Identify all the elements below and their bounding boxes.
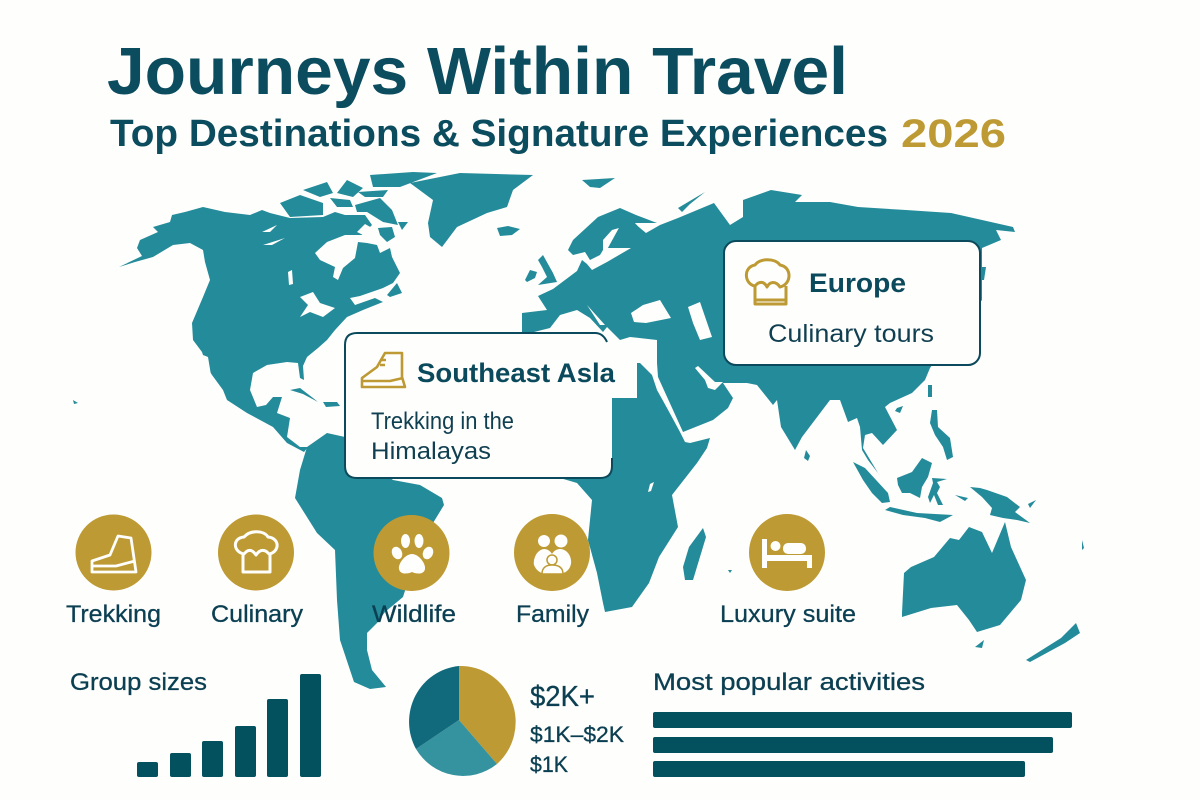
chart heading: Most popular activities: [653, 669, 925, 696]
callout heading: Europe: [809, 268, 906, 298]
callout text: Himalayas: [371, 438, 491, 465]
callout: southeast asia: [345, 333, 637, 478]
callout text: Trekking in the: [371, 408, 514, 435]
callout text: Culinary tours: [768, 320, 934, 348]
chart: group sizes: [70, 669, 321, 777]
tasmania and new zealand: [975, 623, 1080, 662]
chart heading: Group sizes: [70, 669, 207, 696]
callout: europe: [724, 241, 980, 365]
finland: [608, 222, 646, 248]
world map: [73, 172, 1084, 689]
inland seas: [203, 224, 723, 492]
bars: [137, 674, 321, 777]
pie legend: $2K+: [530, 681, 595, 713]
category: culinary: [211, 514, 303, 628]
australia: [902, 522, 1026, 632]
africa: [515, 363, 710, 612]
icon row: [66, 514, 856, 628]
category: trekking: Trekking: [66, 601, 161, 628]
north america: [119, 207, 400, 452]
callout text: [371, 408, 514, 465]
south america: [295, 433, 444, 689]
subtitle: 2026: [901, 112, 1006, 156]
chart: most popular activities: [653, 669, 1072, 777]
small pacific islands: [73, 267, 1084, 573]
southeast asia islands: [853, 410, 1036, 523]
eurasia: [522, 190, 1015, 477]
bars: [653, 712, 1072, 777]
caribbean: [290, 388, 340, 407]
category: trekking: [66, 514, 161, 628]
category: family: [514, 514, 590, 628]
icon: boot: [362, 353, 405, 387]
subtitle: Top Destinations & Signature Experiences: [110, 113, 888, 155]
category: wildlife: Wildlife: [372, 601, 456, 628]
category: luxury suite: [720, 514, 856, 628]
category: wildlife: [372, 515, 456, 628]
europe islands: [525, 178, 932, 461]
category: luxury suite: Luxury suite: [720, 601, 856, 628]
category: culinary: Culinary: [211, 601, 303, 628]
pie legend: $1K: [530, 752, 568, 777]
pie legend: [530, 681, 624, 777]
title: Journeys Within Travel: [107, 34, 848, 109]
arctic islands and greenland: [280, 172, 533, 297]
callout heading: Southeast Asla: [417, 358, 616, 388]
chart: price pie: [409, 666, 624, 777]
pie legend: $1K–$2K: [530, 722, 624, 747]
madagascar: [683, 528, 706, 580]
category: family: Family: [516, 601, 589, 628]
icon: chef hat: [746, 260, 789, 304]
